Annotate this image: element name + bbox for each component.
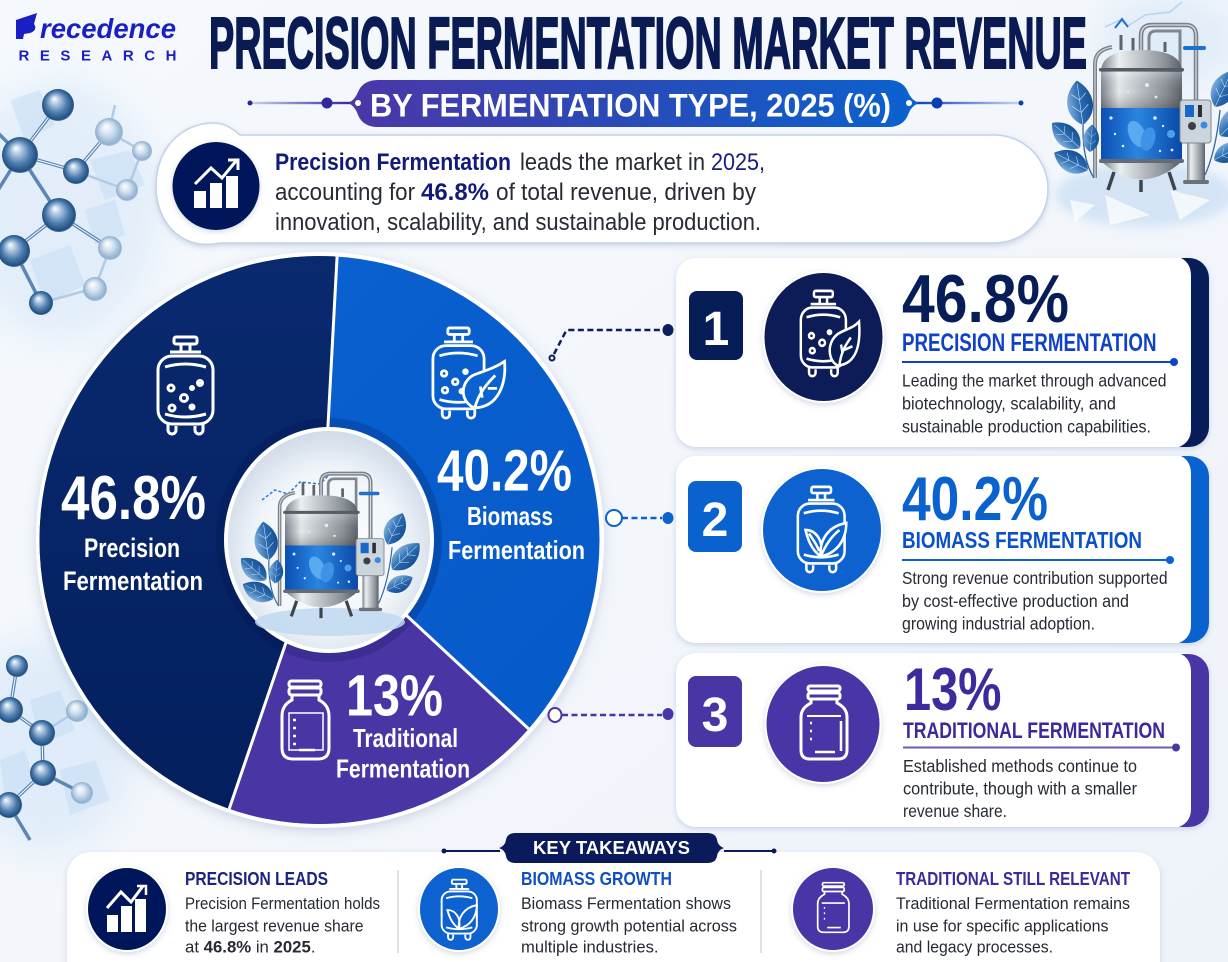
subtitle connector right [915,98,1024,108]
value: 40.2%: 40.2% [437,438,572,504]
rule [902,358,1178,366]
description: revenue share. [903,801,1007,821]
body text: strong growth potential across [521,918,737,936]
value: 40.2% [902,465,1048,534]
heading: TRADITIONAL FERMENTATION [903,718,1165,743]
key takeaways tag: KEY TAKEAWAYS [533,837,690,858]
label: biomass fermentation: Fermentation [448,535,585,565]
panel: precision fermentation card [676,258,1209,447]
rank badge 1 [689,291,743,360]
description: by cost-effective production and [902,591,1129,611]
rank badge 1: 1 [703,303,729,356]
intro text: accounting for [275,179,415,206]
heading: BIOMASS GROWTH [521,869,672,889]
icon circle: jar [766,665,880,783]
heading: BIOMASS FERMENTATION [902,527,1142,553]
takeaway: traditional still relevant [792,867,1130,956]
rank badge 2 [688,481,742,552]
intro text: innovation, scalability, and sustainable production. [275,209,761,236]
description: sustainable production capabilities. [902,416,1151,436]
subtitle banner [348,80,919,127]
icon: jar on traditional slice [282,681,329,759]
rank badge 3: 3 [702,689,728,742]
label: precision fermentation: Fermentation [63,566,203,596]
label: biomass fermentation: Biomass [467,501,553,531]
subtitle text: BY FERMENTATION TYPE, 2025 (%) [370,88,891,124]
illustration: fermenter top right [1045,2,1228,227]
description: Leading the market through advanced [902,370,1166,390]
takeaway: precision leads [87,867,380,956]
panel: traditional fermentation card [676,653,1209,827]
body text [521,895,737,956]
intro text [275,149,765,236]
rule [902,556,1174,564]
subtitle connector left [248,98,350,108]
description: biotechnology, scalability, and [902,394,1116,414]
rule [903,744,1180,752]
description: contribute, though with a smaller [903,778,1137,798]
description: Established methods continue to [903,756,1137,776]
slice: precision fermentation [40,256,337,809]
value: 13% [904,656,1002,723]
logo subline: RESEARCH [18,48,176,64]
body text: the largest revenue share [185,918,364,936]
key takeaways tag [499,833,724,863]
takeaway: biomass growth [419,867,737,956]
heading: TRADITIONAL STILL RELEVANT [896,869,1130,889]
connector: traditional [548,708,674,722]
connector: precision [550,324,674,360]
intro callout [156,123,1048,244]
intro text: 2025, [711,149,765,176]
heading: PRECISION LEADS [185,869,328,889]
rank badge 3 [688,676,742,747]
body text: in use for specific applications [896,918,1108,936]
panel: biomass fermentation card [676,456,1209,643]
connector: biomass [606,510,674,526]
body text: Precision Fermentation holds [185,895,380,913]
key takeaways side lines [442,850,776,852]
logo wordmark: recedence [40,13,176,44]
logo [16,13,176,44]
molecule: upper left [0,89,152,315]
body text: and legacy processes. [896,938,1053,956]
intro text: of total revenue, driven by [496,179,757,206]
value: 13%: 13% [346,664,443,728]
panel: key takeaways [67,833,1160,962]
body text: at 46.8% in 2025. [185,938,315,956]
label: biomass fermentation [448,501,585,565]
value: 46.8%: 46.8% [61,464,206,533]
description: growing industrial adoption. [902,614,1095,634]
icon: tank on precision slice [158,337,213,434]
icon: tank with leaf on biomass slice [433,328,505,418]
description [902,370,1166,436]
description [902,568,1168,634]
body text: multiple industries. [521,938,658,956]
label: traditional fermentation: Traditional [353,723,458,753]
intro text: leads the market in [520,149,705,176]
icon circle: tank with leaves [762,468,882,592]
intro text: 46.8% [421,179,489,206]
molecule: lower left [0,655,93,840]
description [903,756,1137,821]
rank badge 2: 2 [702,494,728,547]
body text [896,895,1130,956]
centre medallion [224,427,434,653]
description: Strong revenue contribution supported [902,568,1168,588]
pie chart [31,250,609,836]
label: traditional fermentation: Fermentation [336,754,470,784]
value: 46.8% [902,261,1069,337]
slice: biomass fermentation [40,256,600,824]
body text: Traditional Fermentation remains [896,895,1130,913]
icon circle: tank with leaf [764,272,884,402]
intro text: Precision Fermentation [275,149,511,176]
icon: growth chart [172,142,260,230]
label: precision fermentation: Precision [84,533,180,563]
body text: Biomass Fermentation shows [521,895,731,913]
label: traditional fermentation [336,723,470,784]
label: precision fermentation [63,533,203,596]
body text [185,895,380,956]
slice: traditional fermentation [229,617,528,824]
